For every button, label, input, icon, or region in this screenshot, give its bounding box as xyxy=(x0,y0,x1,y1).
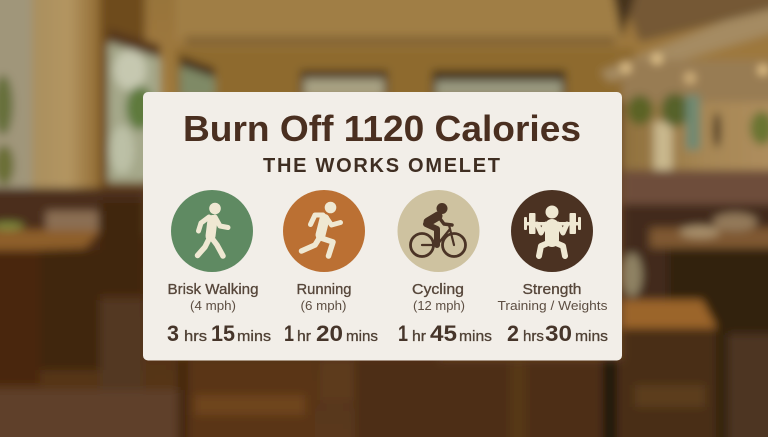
column: brisk walking text xyxy=(167,282,271,346)
column: running text: (6 mph) xyxy=(300,298,346,313)
column: cycling text: Cycling xyxy=(412,282,464,298)
column: brisk walking text: 3 xyxy=(167,321,179,346)
column: running text: 1 xyxy=(284,321,294,346)
column: strength text xyxy=(498,282,608,346)
column: cycling text: 45 xyxy=(430,321,457,346)
column: cycling text: (12 mph) xyxy=(413,298,465,313)
column: brisk walking text: (4 mph) xyxy=(190,298,236,313)
column: running text: 20 xyxy=(316,321,343,346)
icon: cycling xyxy=(398,190,480,272)
column: strength text: hrs xyxy=(523,328,544,345)
panel: info card xyxy=(143,92,622,360)
icon: running xyxy=(283,190,365,272)
title: Burn Off 1120 Calories xyxy=(183,108,581,149)
icon: strength training xyxy=(511,190,593,272)
column: strength text: Training / Weights xyxy=(498,298,608,313)
column: brisk walking text: mins xyxy=(237,328,271,345)
column: running text: mins xyxy=(346,328,378,345)
column: brisk walking text: 15 xyxy=(211,321,235,346)
column: cycling text xyxy=(398,282,492,346)
column: cycling text: 1 xyxy=(398,321,408,346)
column: strength text: 2 xyxy=(507,321,519,346)
column: running text: hr xyxy=(297,328,311,345)
column: strength text: Strength xyxy=(522,282,582,298)
column: cycling text: hr xyxy=(412,328,426,345)
column: running text xyxy=(284,282,378,346)
icon: brisk walking xyxy=(171,190,253,272)
column: running text: Running xyxy=(296,282,352,298)
column: strength text: mins xyxy=(575,328,608,345)
column: brisk walking text: Brisk Walking xyxy=(168,282,258,298)
column: cycling text: mins xyxy=(459,328,492,345)
column: brisk walking text: hrs xyxy=(184,328,207,345)
column: strength text: 30 xyxy=(545,321,572,346)
subtitle: THE WORKS OMELET xyxy=(263,155,500,177)
